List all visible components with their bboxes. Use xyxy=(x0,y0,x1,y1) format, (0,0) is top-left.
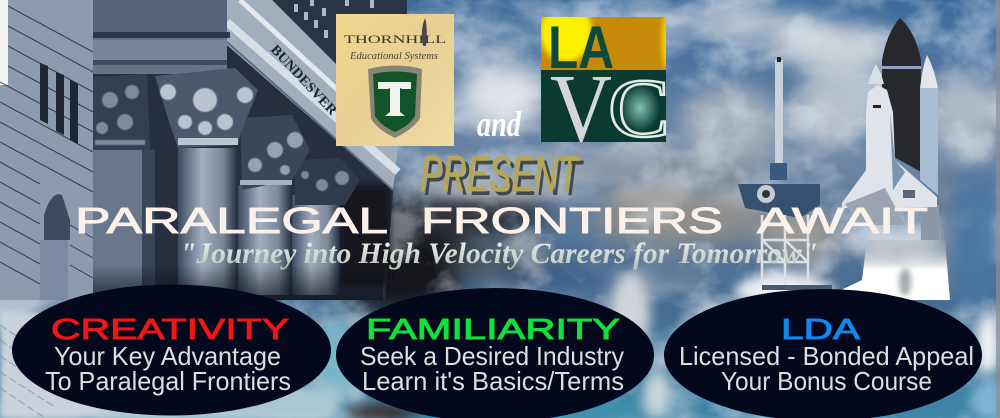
PRESENT xyxy=(420,146,584,206)
heading: FAMILIARITY xyxy=(366,314,620,346)
open book pages xyxy=(0,310,340,418)
text block: Learn it's Basics/Terms xyxy=(362,366,624,396)
logo: Thornhill Educational Systems: Educational Systems xyxy=(349,51,438,62)
wall xyxy=(0,0,93,300)
panel: creativity xyxy=(12,284,331,416)
heading: LDA xyxy=(781,314,861,346)
logo: Thornhill Educational Systems: THORNHILL xyxy=(344,34,446,46)
PRESENT: PRESENT xyxy=(420,146,580,202)
wall windows xyxy=(40,63,78,144)
entablature xyxy=(93,0,227,74)
dentil band xyxy=(272,0,407,64)
quill xyxy=(422,18,427,46)
text block xyxy=(679,341,974,396)
PRESENT: PRESENT xyxy=(424,150,584,206)
logo: LAVC: LA xyxy=(548,14,614,81)
logo: LAVC xyxy=(541,17,666,142)
panel: LDA xyxy=(664,289,982,418)
orbiter xyxy=(842,85,937,208)
external tank xyxy=(882,18,921,172)
title: FRONTIERS xyxy=(421,200,723,241)
lettering on the pediment: BUNDESVER xyxy=(267,42,340,119)
left booster cap xyxy=(868,64,884,84)
panel: familiarity xyxy=(336,288,654,418)
text block xyxy=(45,341,291,396)
subtitle: "Journey into High Velocity Careers for Tomorrow" xyxy=(180,237,818,270)
pier capital xyxy=(93,74,150,150)
text block: To Paralegal Frontiers xyxy=(45,366,291,396)
right edge strip xyxy=(996,0,1000,418)
heading: CREATIVITY xyxy=(51,314,289,346)
square pier xyxy=(93,150,155,300)
column 1 xyxy=(178,148,238,290)
pediment xyxy=(227,0,400,190)
text block: Your Key Advantage xyxy=(54,341,281,371)
dark recess xyxy=(93,40,393,300)
logo: Thornhill Educational Systems xyxy=(336,14,454,146)
column 3 xyxy=(292,195,340,295)
space shuttle xyxy=(842,18,939,240)
arched wall niche xyxy=(44,194,70,240)
title: AWAIT xyxy=(757,200,928,241)
text block: Seek a Desired Industry xyxy=(360,341,624,371)
logo: LAVC: C xyxy=(608,62,670,155)
white exhaust plume xyxy=(735,170,996,304)
column 2 xyxy=(238,185,292,295)
right booster xyxy=(920,88,938,195)
text block: Licensed - Bonded Appeal xyxy=(679,341,974,371)
title: PARALEGAL xyxy=(75,200,388,241)
launch tower xyxy=(738,57,832,290)
smoke and clouds xyxy=(315,181,1000,418)
neoclassical building xyxy=(0,0,407,300)
text block xyxy=(360,341,624,396)
title xyxy=(75,200,928,241)
and: and xyxy=(477,104,522,144)
logo: LAVC: V xyxy=(550,55,612,163)
shield xyxy=(368,66,422,138)
text block: Your Bonus Course xyxy=(721,366,932,396)
